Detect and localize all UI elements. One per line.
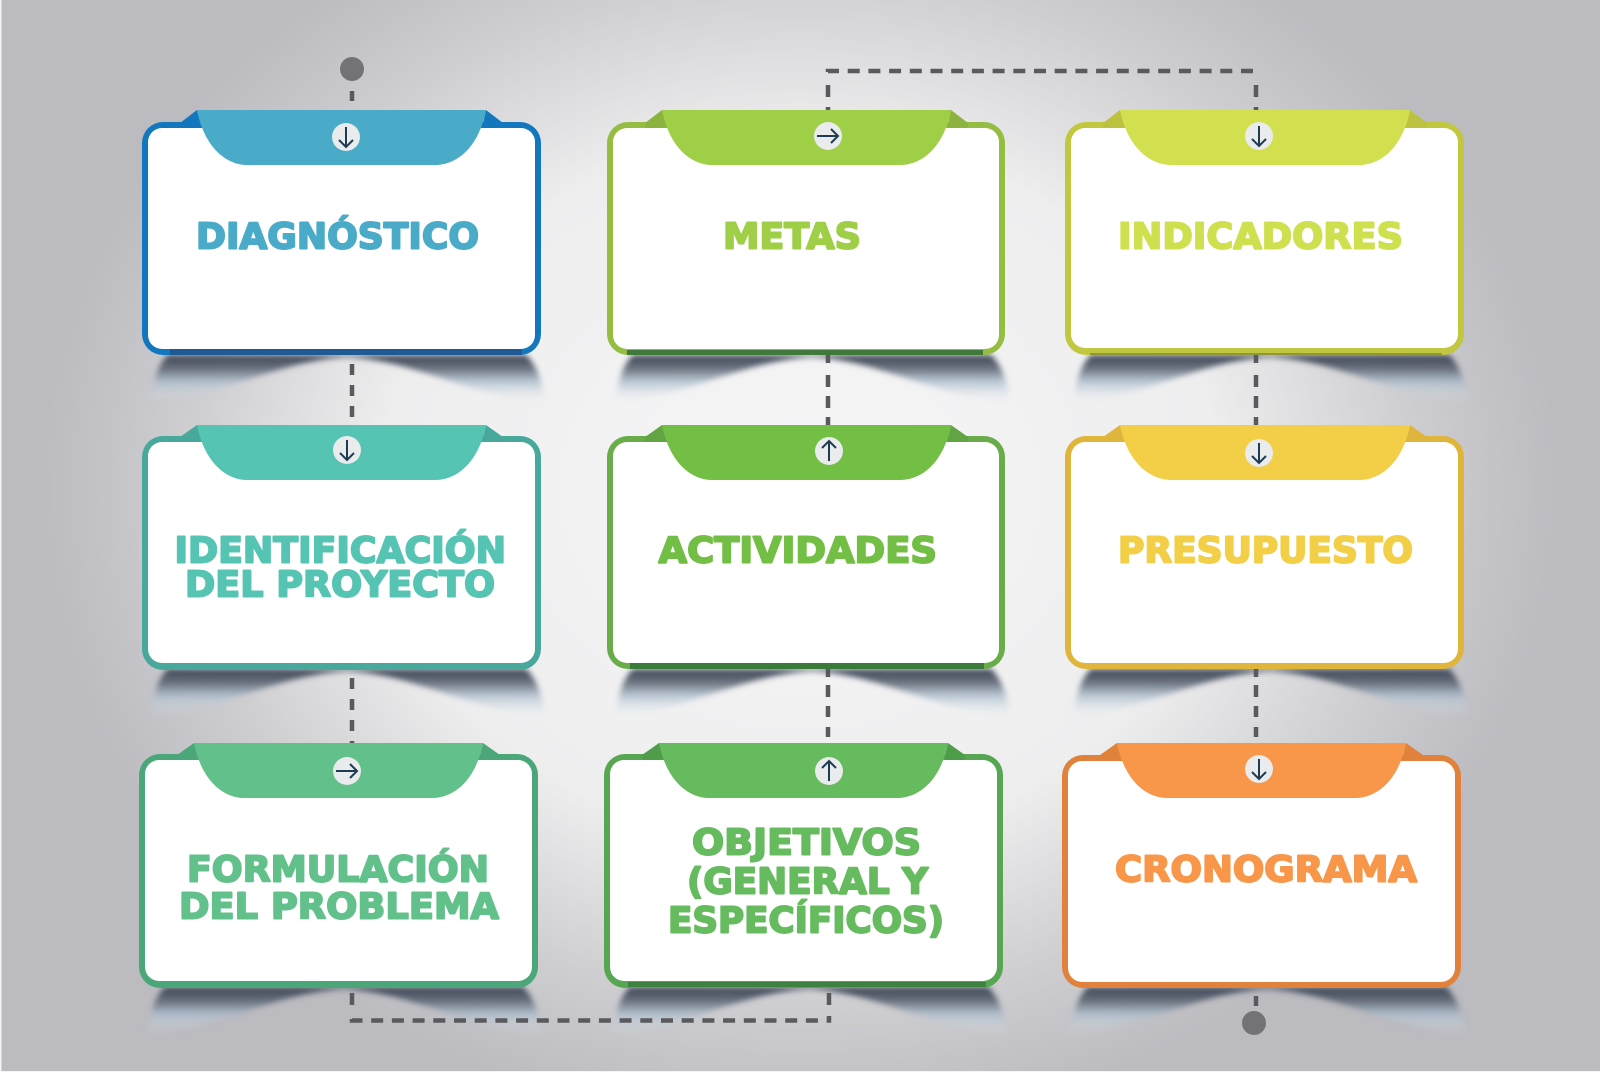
card: metas [607, 110, 1005, 355]
card: diagnóstico [142, 110, 541, 355]
card: objetivos [604, 743, 1003, 988]
dashed connector lines [352, 71, 1256, 1020]
card: cronograma [1062, 743, 1461, 988]
icon: arrow up [815, 757, 843, 785]
icon: arrow down [1245, 439, 1273, 467]
label: formulación del problema: DEL PROBLEMA [179, 886, 500, 928]
card: indicadores [1065, 110, 1464, 355]
label: identificación del proyecto: DEL PROYECTO [185, 564, 495, 606]
label: identificación del proyecto [174, 530, 506, 606]
label: formulación del problema [179, 848, 500, 928]
label: objetivos (general y específicos): (GENERAL Y [687, 862, 929, 902]
label: objetivos (general y específicos): OBJETIVOS [692, 822, 921, 864]
icon: arrow down [332, 123, 360, 151]
icon: arrow right [333, 757, 361, 785]
icon: arrow down [1245, 755, 1273, 783]
start dot [340, 57, 364, 81]
icon: arrow up [815, 437, 843, 465]
label: objetivos (general y específicos): ESPECÍFICOS) [668, 900, 944, 942]
icon: arrow down [333, 436, 361, 464]
label: identificación del proyecto: IDENTIFICACIÓN [174, 530, 506, 572]
icon: arrow right [814, 122, 842, 150]
label: presupuesto: PRESUPUESTO [1118, 530, 1413, 572]
end dot [1242, 1011, 1266, 1035]
label: diagnóstico: DIAGNÓSTICO [196, 216, 479, 258]
card: presupuesto [1065, 425, 1464, 669]
label: actividades: ACTIVIDADES [658, 530, 937, 572]
label: metas: METAS [723, 216, 861, 258]
label: objetivos (general y específicos) [668, 822, 944, 942]
card: identificación del proyecto [142, 425, 541, 670]
label: formulación del problema: FORMULACIÓN [187, 848, 489, 890]
card shadows [148, 355, 1468, 1034]
card: formulación del problema [139, 743, 538, 988]
label: indicadores: INDICADORES [1118, 216, 1403, 258]
icon: arrow down [1245, 122, 1273, 150]
label: cronograma: CRONOGRAMA [1115, 850, 1418, 890]
card: actividades [607, 425, 1005, 669]
